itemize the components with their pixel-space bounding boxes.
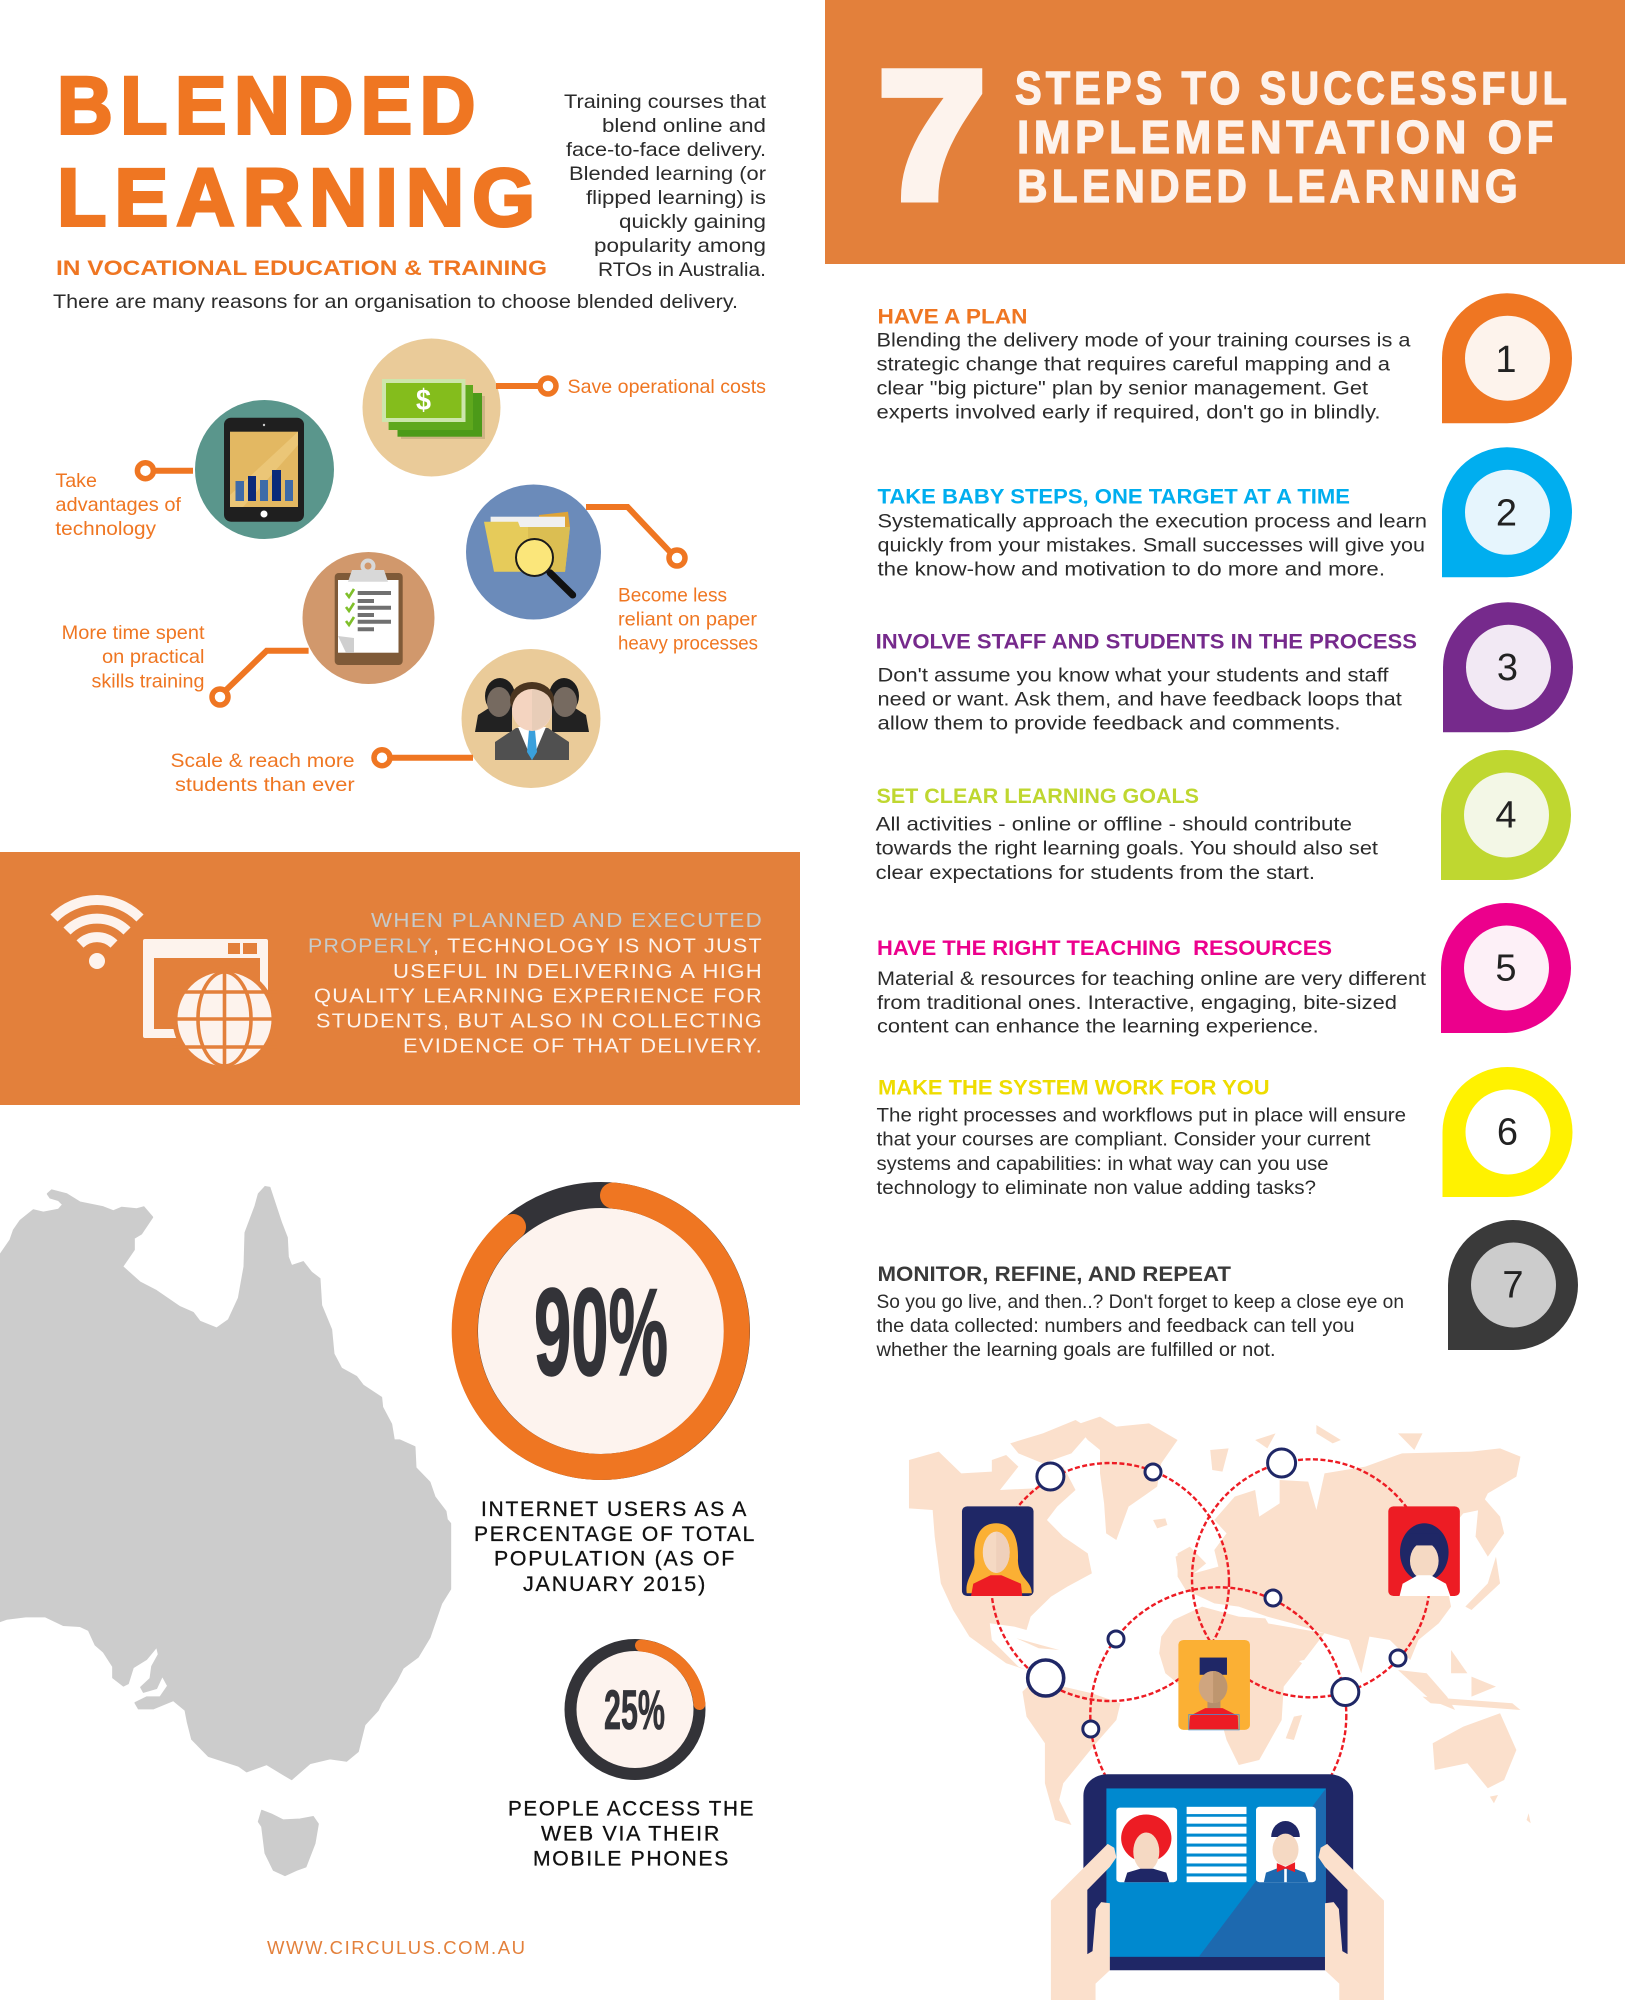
network nodes (1028, 1449, 1406, 1737)
panel: 7 steps header (825, 0, 1625, 264)
chart: 25% donut: 25% (604, 1678, 665, 1741)
step 4: towards the right learning goals. You should also set (876, 838, 1379, 860)
step 3: allow them to provide feedback and comments. (878, 713, 1340, 735)
text: internet users caption: INTERNET USERS AS A (481, 1498, 748, 1521)
text: internet users caption: JANUARY 2015) (523, 1573, 707, 1596)
reason: more time on practical skills: skills training (92, 671, 204, 693)
callout text: QUALITY LEARNING EXPERIENCE FOR (314, 986, 763, 1008)
step 6: that your courses are compliant. Consider your current (876, 1129, 1371, 1151)
step 1: strategic change that requires careful mapping and a (876, 354, 1390, 376)
reason: more time on practical skills: More time spent (62, 622, 205, 644)
step 7: whether the learning goals are fulfilled or not. (875, 1339, 1276, 1361)
reason: take advantages of technology: technology (55, 518, 156, 540)
intro paragraph: quickly gaining (619, 211, 766, 233)
text: mobile phones caption: MOBILE PHONES (533, 1848, 730, 1871)
panel: technology callout banner (0, 852, 800, 1105)
step 3 (876, 602, 1573, 735)
intro paragraph: flipped learning) is (586, 187, 766, 209)
step 6: systems and capabilities: in what way can you use (876, 1153, 1328, 1175)
step 7: MONITOR, REFINE, AND REPEAT (878, 1263, 1231, 1286)
pin: 5: 5 (1495, 948, 1517, 990)
world map (909, 1417, 1531, 1825)
reason: scale and reach more students: students than ever (175, 774, 355, 796)
subtitle: IN VOCATIONAL EDUCATION & TRAINING (56, 257, 547, 280)
intro paragraph: popularity among (594, 235, 766, 257)
intro paragraph: face-to-face delivery. (566, 139, 766, 161)
text: internet users caption: POPULATION (AS OF (494, 1548, 736, 1571)
reason: more time on practical skills: on practical (102, 646, 204, 668)
step 6: MAKE THE SYSTEM WORK FOR YOU (878, 1076, 1270, 1099)
step 4 (876, 750, 1571, 884)
step 3: Don't assume you know what your students and staff (878, 665, 1389, 687)
step 2: quickly from your mistakes. Small successes will give you (878, 534, 1425, 556)
text: mobile phones caption (508, 1798, 755, 1871)
intro paragraph: Blended learning (or (569, 163, 767, 185)
pin: 2: 2 (1496, 492, 1517, 534)
step 2: TAKE BABY STEPS, ONE TARGET AT A TIME (878, 485, 1350, 508)
step 3: need or want. Ask them, and have feedback loops that (878, 689, 1402, 711)
text: mobile phones caption: PEOPLE ACCESS THE (508, 1798, 755, 1821)
callout text: EVIDENCE OF THAT DELIVERY. (403, 1036, 763, 1058)
illustration: global network with tablet (909, 1417, 1531, 2000)
reason: take advantages of technology (55, 400, 334, 540)
intro paragraph: RTOs in Australia. (598, 259, 766, 281)
reason: become less reliant on paper: heavy processes (618, 632, 758, 654)
chart: 90% donut: 90% (534, 1264, 668, 1402)
callout text: USEFUL IN DELIVERING A HIGH (393, 961, 763, 983)
pin: 5 (1441, 903, 1571, 1033)
reason: scale and reach more students: Scale & reach more (170, 750, 354, 772)
title: blended learning (57, 60, 543, 244)
step 4: SET CLEAR LEARNING GOALS (876, 785, 1199, 808)
reason: take advantages of technology: advantages of (55, 494, 182, 516)
reason: save operational costs: $ (416, 384, 431, 417)
step 1: experts involved early if required, don't go in blindly. (876, 401, 1380, 423)
step 6: The right processes and workflows put in place will ensure (876, 1105, 1406, 1127)
reason: become less reliant on paper: reliant on paper (618, 609, 758, 631)
step 5: HAVE THE RIGHT TEACHING RESOURCES (877, 937, 1332, 960)
step 6: technology to eliminate non value adding tasks? (876, 1177, 1316, 1199)
pin: 7 (1448, 1220, 1578, 1350)
reason: more time on practical skills (62, 552, 434, 705)
text: internet users caption: PERCENTAGE OF TOTAL (474, 1523, 756, 1546)
pin: 4 (1441, 750, 1571, 880)
step 1: Blending the delivery mode of your training courses is a (876, 330, 1411, 352)
callout text (308, 910, 763, 1058)
step 5: content can enhance the learning experience. (877, 1016, 1319, 1038)
pin: 6 (1442, 1067, 1572, 1197)
map: australia (0, 1187, 451, 1875)
title: blended learning: BLENDED (57, 60, 483, 152)
website url: WWW.CIRCULUS.COM.AU (267, 1938, 526, 1958)
step 7 (875, 1220, 1578, 1361)
text: internet users caption (474, 1498, 756, 1596)
chart: 25% donut (570, 1645, 700, 1774)
chart: 90% donut (465, 1195, 737, 1467)
step 2: the know-how and motivation to do more and more. (878, 558, 1385, 580)
step 5: from traditional ones. Interactive, engaging, bite-sized (877, 992, 1397, 1014)
pin: 6: 6 (1497, 1112, 1518, 1154)
reasons lead-in text: There are many reasons for an organisation to choose blended delivery. (53, 291, 738, 313)
step 5: Material & resources for teaching online are very different (877, 968, 1427, 990)
icon: browser window with globe (143, 939, 277, 1071)
dashed network rings (991, 1459, 1430, 1843)
intro paragraph: Training courses that (564, 91, 767, 113)
title: blended learning: LEARNING (57, 152, 543, 244)
pin: 1: 1 (1495, 339, 1517, 381)
card: woman with dark hair (1388, 1506, 1460, 1596)
pin: 2 (1442, 447, 1572, 577)
step 4: All activities - online or offline - should contribute (876, 814, 1352, 836)
step 2 (878, 447, 1572, 580)
heading: IMPLEMENTATION OF (1017, 111, 1558, 163)
callout text: WHEN PLANNED AND EXECUTED (371, 910, 763, 932)
icon: wifi (54, 900, 140, 969)
callout text: PROPERLY (308, 936, 433, 958)
step 1: clear "big picture" plan by senior management. Get (876, 378, 1369, 400)
tablet (1083, 1774, 1353, 1970)
callout text: STUDENTS, BUT ALSO IN COLLECTING (316, 1011, 763, 1033)
step 3: INVOLVE STAFF AND STUDENTS IN THE PROCESS (876, 630, 1417, 653)
reason: scale and reach more students (170, 649, 600, 796)
reason: become less reliant on paper: Become less (618, 585, 727, 607)
hands (1051, 1844, 1384, 2000)
intro paragraph: blend online and (602, 115, 766, 137)
pin: 3 (1443, 602, 1573, 732)
intro paragraph (564, 91, 767, 281)
reason: save operational costs: Save operational costs (568, 376, 766, 398)
step 1: HAVE A PLAN (878, 305, 1028, 328)
people cards and tablet (962, 1506, 1460, 2000)
step 5 (877, 903, 1571, 1038)
reason: save operational costs (362, 338, 766, 476)
step 7: So you go live, and then..? Don't forget to keep a close eye on (876, 1291, 1404, 1313)
step 1 (876, 293, 1572, 423)
text: mobile phones caption: WEB VIA THEIR (541, 1823, 721, 1846)
pin: 4: 4 (1495, 794, 1517, 836)
reason: take advantages of technology: Take (55, 470, 97, 492)
reason: become less reliant on paper (466, 484, 758, 654)
callout text: , TECHNOLOGY IS NOT JUST (433, 936, 763, 958)
step 6 (876, 1067, 1572, 1199)
step 2: Systematically approach the execution process and learn (878, 510, 1427, 532)
pin: 3: 3 (1497, 647, 1518, 689)
step 4: clear expectations for students from the start. (876, 862, 1315, 884)
big numeral 7: 7 (878, 33, 986, 237)
heading (1015, 62, 1571, 212)
pin: 1 (1442, 293, 1572, 423)
heading: BLENDED LEARNING (1017, 160, 1522, 212)
card: woman with blonde hair (962, 1506, 1034, 1596)
step 7: the data collected: numbers and feedback can tell you (876, 1315, 1354, 1337)
card: man with cap (1178, 1640, 1250, 1730)
pin: 7: 7 (1502, 1264, 1524, 1306)
